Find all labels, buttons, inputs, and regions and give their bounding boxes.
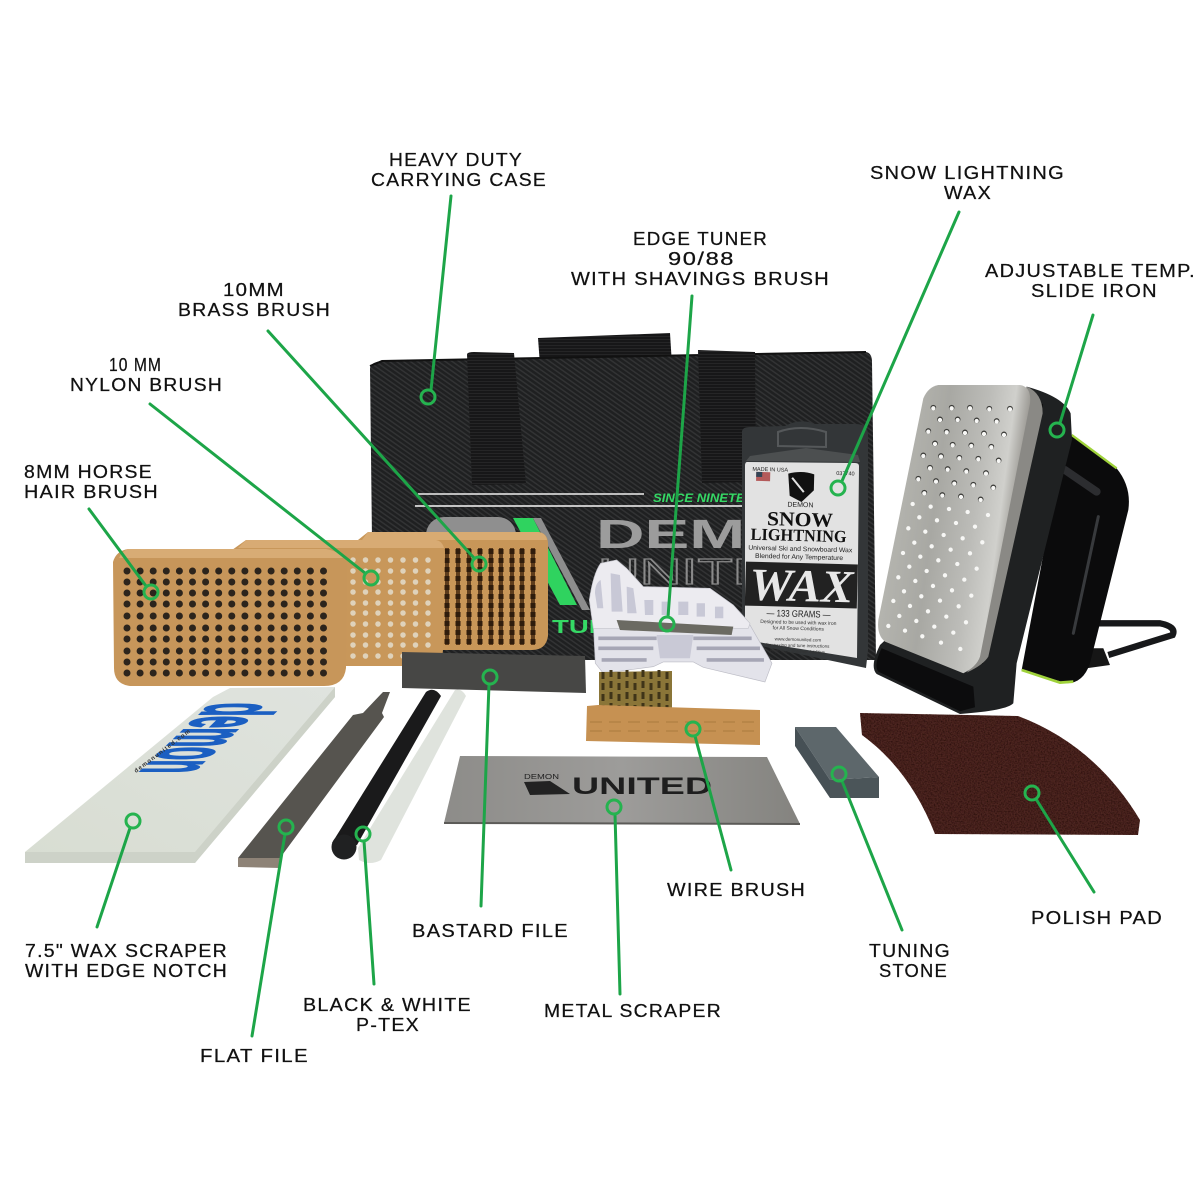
wax package text: www.demonunited.com: [775, 636, 821, 643]
wax package text: [744, 467, 860, 655]
label: p-tex: BLACK & WHITE: [303, 995, 472, 1015]
scraper logo: [524, 773, 712, 800]
iron cord: [1087, 623, 1173, 668]
label: slide iron: [985, 261, 1196, 301]
leader: bastard file: [481, 670, 497, 906]
label: wax scraper: [25, 941, 228, 981]
wax package text: WAX: [749, 559, 855, 612]
case logo: TUNE: [552, 617, 627, 637]
label: brass brush: 10MM: [223, 280, 285, 300]
leader: tuning stone: [832, 767, 902, 930]
iron body: [874, 387, 1072, 714]
leader: flat file: [252, 820, 293, 1036]
iron handle: [1022, 435, 1129, 683]
label: slide iron: SLIDE IRON: [1031, 281, 1158, 301]
wax scraper: [25, 687, 335, 863]
wax package text: SNOW: [767, 508, 833, 532]
label: heavy duty carrying case: CARRYING CASE: [371, 170, 547, 190]
snow lightning wax package: [742, 421, 868, 668]
wax package text: for waxing and tune instructions: [766, 642, 830, 649]
label: p-tex: [303, 995, 472, 1035]
label: snow lightning wax: WAX: [944, 183, 992, 203]
leader: snow lightning wax: [831, 212, 959, 495]
label: wire brush: WIRE BRUSH: [667, 880, 806, 900]
leader: nylon brush: [150, 404, 378, 585]
label: edge tuner: EDGE TUNER: [633, 229, 768, 249]
metal scraper: [444, 756, 800, 824]
label: horse hair brush: 8MM HORSE: [24, 462, 153, 482]
leader: p-tex: [356, 827, 374, 984]
leader: carrying case: [421, 196, 451, 404]
label: p-tex: P-TEX: [356, 1015, 420, 1035]
slide iron: [874, 385, 1173, 714]
label: horse hair brush: [24, 462, 159, 502]
leader: wax scraper: [97, 814, 140, 927]
case straps: [467, 350, 756, 485]
label: heavy duty carrying case: HEAVY DUTY: [389, 150, 523, 170]
bastard file: [402, 652, 586, 693]
edge tuner: [589, 560, 772, 682]
label: wax scraper: WITH EDGE NOTCH: [25, 961, 228, 981]
scraper logo: demonunited.com: [134, 729, 192, 775]
leader: metal scraper: [607, 800, 621, 994]
wax package text: LIGHTNING: [750, 525, 847, 546]
carrying case: [370, 333, 876, 660]
wax package text: for All Snow Conditions: [772, 625, 824, 633]
label: brass brush: [178, 280, 331, 320]
label: nylon brush: NYLON BRUSH: [70, 375, 223, 395]
white p-tex: [358, 690, 466, 863]
wax package text: Universal Ski and Snowboard Wax: [748, 545, 853, 554]
black p-tex: [332, 690, 441, 860]
scraper logo: DEMON: [524, 774, 559, 781]
label: snow lightning wax: [870, 163, 1065, 203]
brass brush: [358, 532, 548, 650]
wax package text: — 133 GRAMS —: [766, 608, 831, 621]
leader: wire brush: [686, 722, 731, 870]
leader: edge tuner: [660, 296, 692, 631]
label: nylon brush: 10 MM: [109, 355, 162, 375]
iron plate: [878, 385, 1043, 673]
wax package text: Blended for Any Temperature: [755, 553, 843, 562]
leader: polish pad: [1025, 786, 1094, 892]
scraper logo: UNITED: [572, 773, 712, 800]
horse hair brush: [113, 549, 347, 686]
scraper logo: demon: [117, 703, 303, 773]
label: nylon brush: [70, 355, 223, 395]
label: metal scraper: METAL SCRAPER: [544, 1001, 722, 1021]
case logo: [415, 491, 846, 637]
tuning stone: [795, 727, 879, 798]
label: wax scraper: 7.5" WAX SCRAPER: [25, 941, 228, 961]
label: slide iron: ADJUSTABLE TEMP.: [985, 261, 1196, 281]
wax package text: High Tech Polymer Additive: [770, 648, 826, 655]
leader: horse hair brush: [89, 509, 158, 599]
label: edge tuner: [571, 229, 830, 289]
label: brass brush: BRASS BRUSH: [178, 300, 331, 320]
label: flat file: FLAT FILE: [200, 1046, 309, 1066]
wax package text: MADE IN USA: [752, 467, 788, 474]
case logo: UNITED: [598, 551, 813, 592]
label: bastard file: BASTARD FILE: [412, 921, 569, 941]
wax package text: 037740: [836, 471, 855, 477]
label: polish pad: POLISH PAD: [1031, 908, 1163, 928]
case logo: SINCE NINETEEN: [653, 491, 763, 505]
label: tuning stone: [869, 941, 951, 981]
polish pad: [860, 713, 1140, 835]
label: tuning stone: STONE: [879, 961, 948, 981]
label: horse hair brush: HAIR BRUSH: [24, 482, 159, 502]
flat file: [238, 692, 390, 868]
wire brush: [586, 670, 760, 745]
nylon brush: [232, 540, 445, 666]
label: snow lightning wax: SNOW LIGHTNING: [870, 163, 1065, 183]
wax package text: Designed to be used with wax iron: [760, 619, 837, 627]
leader: brass brush: [268, 331, 486, 571]
label: edge tuner: WITH SHAVINGS BRUSH: [571, 269, 830, 289]
wax package text: DEMON: [787, 502, 814, 509]
label: tuning stone: TUNING: [869, 941, 951, 961]
label: heavy duty carrying case: [371, 150, 547, 190]
case logo: DEMON: [596, 511, 846, 557]
leader: slide iron: [1050, 315, 1093, 437]
label: edge tuner: 90/88: [668, 249, 735, 269]
